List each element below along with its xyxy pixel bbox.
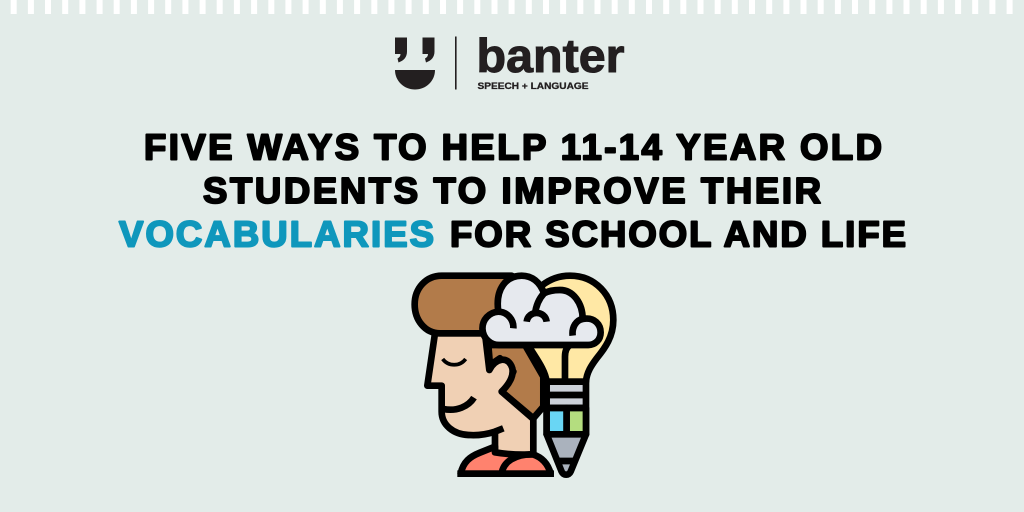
lightbulb — [528, 276, 613, 382]
title line 2: STUDENTS TO IMPROVE THEIR — [203, 170, 821, 211]
title line 1: FIVE WAYS TO HELP 11-14 YEAR OLD — [144, 126, 882, 168]
hair top — [415, 276, 512, 333]
cloud — [482, 276, 601, 345]
chin line — [495, 428, 503, 432]
logo wordmark: banter — [476, 29, 624, 82]
pencil blue segment — [547, 408, 567, 434]
title line 3 remainder: FOR SCHOOL AND LIFE — [450, 214, 906, 254]
back hair — [488, 345, 543, 418]
icon: head with cloud and lightbulb pencil — [415, 276, 613, 475]
logo tagline: SPEECH + LANGUAGE — [478, 81, 589, 92]
pencil body — [547, 382, 586, 434]
face and neck — [427, 333, 533, 455]
smile — [443, 398, 474, 410]
pencil tip — [547, 434, 586, 475]
icon: smiling quote-mark face — [395, 38, 435, 90]
title line 3 highlight: VOCABULARIES — [119, 214, 434, 254]
pencil green segment — [567, 408, 586, 434]
title — [119, 126, 906, 254]
logo: banter speech + language — [395, 29, 624, 92]
closed eye — [443, 359, 466, 365]
base line — [457, 464, 554, 484]
shirt — [461, 447, 551, 474]
logo divider — [455, 36, 457, 90]
